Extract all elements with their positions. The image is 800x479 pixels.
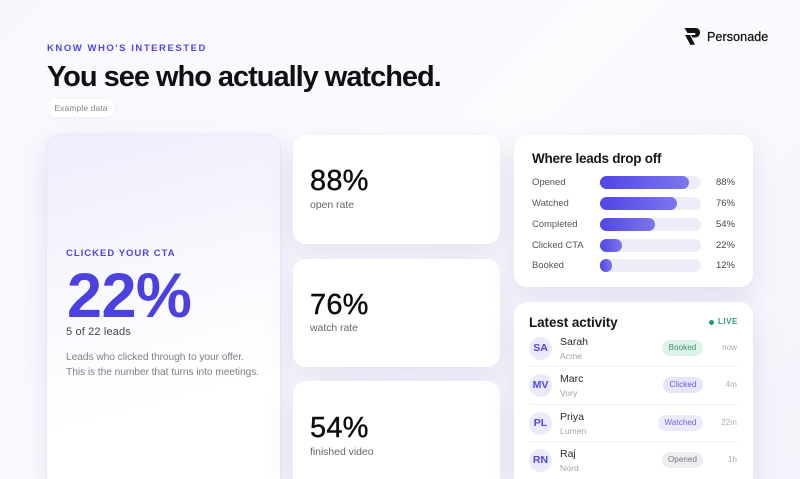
bar: clicked CTA: 22%	[716, 240, 735, 251]
activity row: Raj: RN	[533, 454, 548, 466]
activity row: Marc	[529, 373, 737, 398]
example data pill: Example data	[54, 103, 108, 113]
figure: 88%	[310, 165, 369, 197]
bar: completed	[532, 218, 735, 231]
activity row: Priya: Priya	[560, 411, 584, 423]
activity row: Priya	[529, 411, 737, 436]
activity row: Raj: Opened	[668, 455, 697, 464]
wordmark: Personade	[707, 30, 768, 44]
panel: latest activity	[514, 302, 753, 479]
activity row: Sarah	[529, 336, 737, 360]
live indicator: LIVE	[718, 317, 738, 326]
activity row: Marc: Vory	[560, 388, 577, 398]
activity row: Sarah: Sarah	[560, 336, 588, 348]
panel: clicked your CTA	[47, 135, 280, 479]
activity row: Marc: Clicked	[670, 380, 696, 389]
bar: clicked CTA: Clicked CTA	[532, 240, 584, 251]
activity row: Raj: 1h	[728, 455, 737, 464]
figure: 54%	[310, 412, 369, 444]
panel heading: Where leads drop off	[532, 151, 661, 166]
bar: watched: 76%	[716, 198, 735, 209]
bar: watched	[532, 197, 735, 210]
panel label: CLICKED YOUR CTA	[66, 248, 176, 259]
activity row: Priya: 22m	[721, 418, 737, 427]
example data pill	[47, 99, 115, 117]
bar: opened	[532, 176, 735, 189]
activity row: Sarah: Booked	[669, 343, 696, 352]
panel heading: Latest activity	[529, 315, 618, 330]
activity row: Marc: Marc	[560, 373, 583, 385]
figure: 76%	[310, 289, 369, 321]
key figure: 22%	[67, 261, 191, 331]
activity row: Raj	[529, 448, 737, 472]
activity row: Marc: 4m	[726, 380, 737, 389]
bar: watched: Watched	[532, 198, 569, 209]
description: Leads who clicked through to your offer.	[66, 352, 244, 363]
caption: open rate	[310, 199, 354, 211]
icon: Personade mark	[684, 28, 700, 45]
description	[66, 352, 259, 378]
live indicator	[709, 317, 738, 326]
logo	[684, 28, 768, 45]
activity row: Priya: Lumen	[560, 426, 586, 436]
activity row: Raj: Raj	[560, 448, 576, 460]
panel: where leads drop off	[514, 135, 753, 287]
title: You see who actually watched.	[47, 61, 441, 93]
activity row: Priya: PL	[534, 417, 547, 429]
eyebrow label: KNOW WHO'S INTERESTED	[47, 43, 207, 54]
panel: finished video	[293, 381, 500, 479]
bar: completed: Completed	[532, 219, 578, 230]
bar: booked: Booked	[532, 260, 564, 271]
activity row: Sarah: Acme	[560, 350, 582, 360]
caption: watch rate	[310, 322, 358, 334]
lead count: 5 of 22 leads	[66, 326, 131, 338]
panel: open rate	[293, 135, 500, 244]
activity row: Sarah: SA	[533, 342, 548, 354]
description: This is the number that turns into meetings.	[66, 366, 259, 378]
activity row: Priya: Watched	[664, 418, 696, 427]
bar: booked: 12%	[716, 260, 735, 271]
bar: clicked CTA	[532, 239, 735, 252]
bar: opened: Opened	[532, 177, 566, 188]
panel: watch rate	[293, 259, 500, 367]
caption: finished video	[310, 446, 374, 458]
activity row: Marc: MV	[533, 379, 548, 391]
activity row: Sarah: now	[722, 343, 737, 352]
bar: booked	[532, 259, 735, 272]
bar: completed: 54%	[716, 219, 735, 230]
activity row: Raj: Nord	[560, 462, 579, 472]
bar: opened: 88%	[716, 177, 735, 188]
